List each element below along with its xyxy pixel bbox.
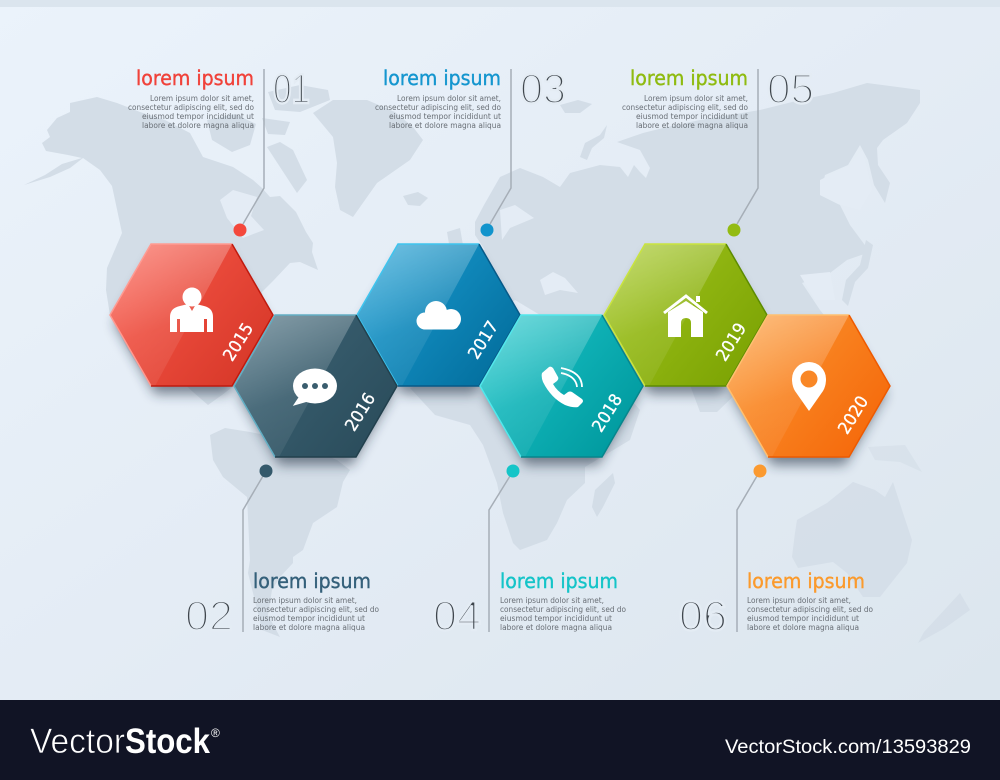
icon: telephone [542,367,583,407]
number 02: 02 [185,592,233,639]
text block 06: eiusmod tempor incididunt ut [747,614,859,623]
text block 02: labore et dolore magna aliqua [253,623,365,632]
text block 01: labore et dolore magna aliqua [142,121,254,130]
text block 06 [747,596,873,632]
text block 05 [622,94,748,130]
text block 06: labore et dolore magna aliqua [747,623,859,632]
text block 05: Lorem ipsum dolor sit amet, [644,94,748,103]
footer bar [0,700,1000,780]
year 2016: 2016 [341,390,380,435]
text block 03: consectetur adipiscing elit, sed do [375,103,501,112]
inland seas on map [220,150,872,300]
heading 05: lorem ipsum [630,66,748,90]
number 01: 01 [273,65,310,112]
year 2020: 2020 [834,393,873,438]
heading 03: lorem ipsum [383,66,501,90]
registered mark: ® [211,726,220,740]
number 04: 04 [433,592,481,639]
text block 03 [375,94,501,130]
heading 01: lorem ipsum [136,66,254,90]
text block 04: labore et dolore magna aliqua [500,623,612,632]
image id: VectorStock.com/13593829 [725,737,971,758]
hexagon 2017 [357,244,520,386]
hexagon shadows [114,254,886,465]
icon: person [170,288,213,332]
text block 06: Lorem ipsum dolor sit amet, [747,596,851,605]
year 2018: 2018 [588,391,627,436]
heading 04: lorem ipsum [500,569,618,593]
number 06: 06 [679,592,727,639]
year 2015: 2015 [219,320,258,365]
text block 04: eiusmod tempor incididunt ut [500,614,612,623]
icon: map pin [792,362,826,411]
text block 03: eiusmod tempor incididunt ut [389,112,501,121]
text block 01: eiusmod tempor incididunt ut [142,112,254,121]
callout 05 [622,65,814,236]
hexagon 2016 [234,315,397,457]
number 05: 05 [767,65,814,112]
year 2019: 2019 [712,320,751,365]
text block 05: consectetur adipiscing elit, sed do [622,103,748,112]
text block 01: consectetur adipiscing elit, sed do [128,103,254,112]
text block 02 [253,596,379,632]
text block 04: consectetur adipiscing elit, sed do [500,605,626,614]
icon: speech bubble [293,368,337,405]
heading 06: lorem ipsum [747,569,865,593]
text block 02: consectetur adipiscing elit, sed do [253,605,379,614]
heading 02: lorem ipsum [253,569,371,593]
callout 01 [128,65,310,236]
number 03: 03 [520,65,566,112]
callout 02 [185,464,379,639]
callout 03 [375,65,566,236]
hexagon 2019 [604,244,767,386]
text block 05: eiusmod tempor incididunt ut [636,112,748,121]
VectorStock logo bold: Stock [125,722,210,761]
hexagon 2015 [110,244,273,386]
text block 06: consectetur adipiscing elit, sed do [747,605,873,614]
text block 04: Lorem ipsum dolor sit amet, [500,596,604,605]
text block 03: labore et dolore magna aliqua [389,121,501,130]
text block 01: Lorem ipsum dolor sit amet, [150,94,254,103]
text block 05: labore et dolore magna aliqua [636,121,748,130]
callout 06 [679,464,873,639]
icon: cloud [416,301,461,330]
icon: house [664,296,707,337]
text block 01 [128,94,254,130]
hexagon 2018 [480,315,643,457]
year 2017: 2017 [464,318,503,363]
VectorStock logo: Vector [30,722,125,761]
world map [24,83,970,643]
text block 02: Lorem ipsum dolor sit amet, [253,596,357,605]
callout 04 [433,464,626,639]
text block 04 [500,596,626,632]
text block 03: Lorem ipsum dolor sit amet, [397,94,501,103]
hexagon 2020 [727,315,890,457]
top strip [0,0,1000,7]
text block 02: eiusmod tempor incididunt ut [253,614,365,623]
